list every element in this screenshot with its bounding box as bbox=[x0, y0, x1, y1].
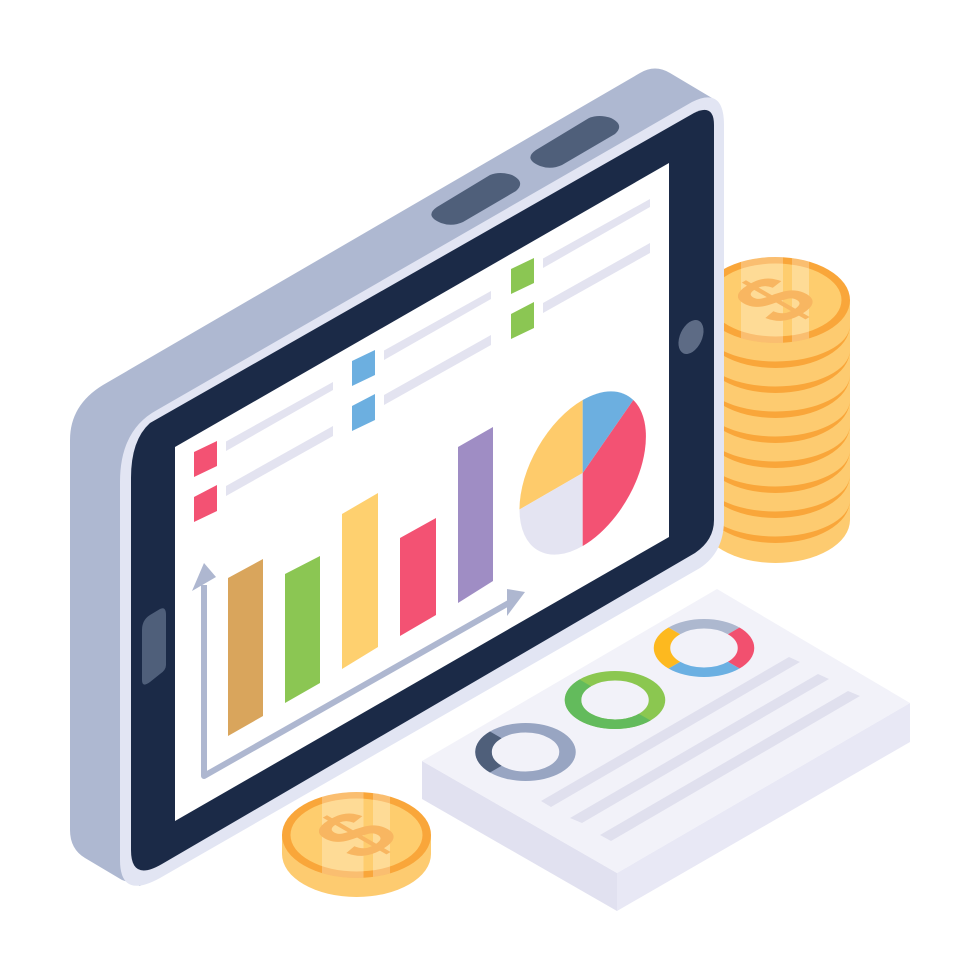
tablet front frame bbox=[120, 97, 724, 886]
tablet body side bbox=[70, 68, 724, 886]
document text lines bbox=[541, 657, 860, 841]
document right side bbox=[617, 703, 910, 911]
home button bbox=[142, 608, 166, 685]
report document bbox=[422, 589, 910, 911]
donut multicolour bbox=[662, 624, 746, 672]
single coin bbox=[282, 785, 431, 897]
legend red bbox=[194, 382, 333, 522]
top button left bbox=[431, 173, 520, 225]
document left side bbox=[422, 761, 617, 911]
single coin: $ bbox=[292, 797, 421, 873]
camera bbox=[673, 316, 709, 358]
coin stack: $ bbox=[711, 262, 840, 338]
tablet bbox=[70, 68, 724, 886]
infographic illustration bbox=[70, 68, 910, 911]
top button right bbox=[530, 116, 619, 168]
legend blue bbox=[352, 291, 491, 431]
screen bbox=[175, 163, 669, 821]
legend green bbox=[511, 199, 650, 339]
chart axes with arrows bbox=[192, 563, 525, 776]
document top bbox=[422, 589, 910, 873]
bar chart bbox=[228, 427, 493, 736]
donut green bbox=[573, 676, 657, 724]
tablet dark bezel bbox=[131, 110, 714, 870]
donut grey bbox=[484, 728, 568, 776]
pie chart bbox=[519, 364, 646, 582]
coin stack bbox=[718, 257, 850, 563]
